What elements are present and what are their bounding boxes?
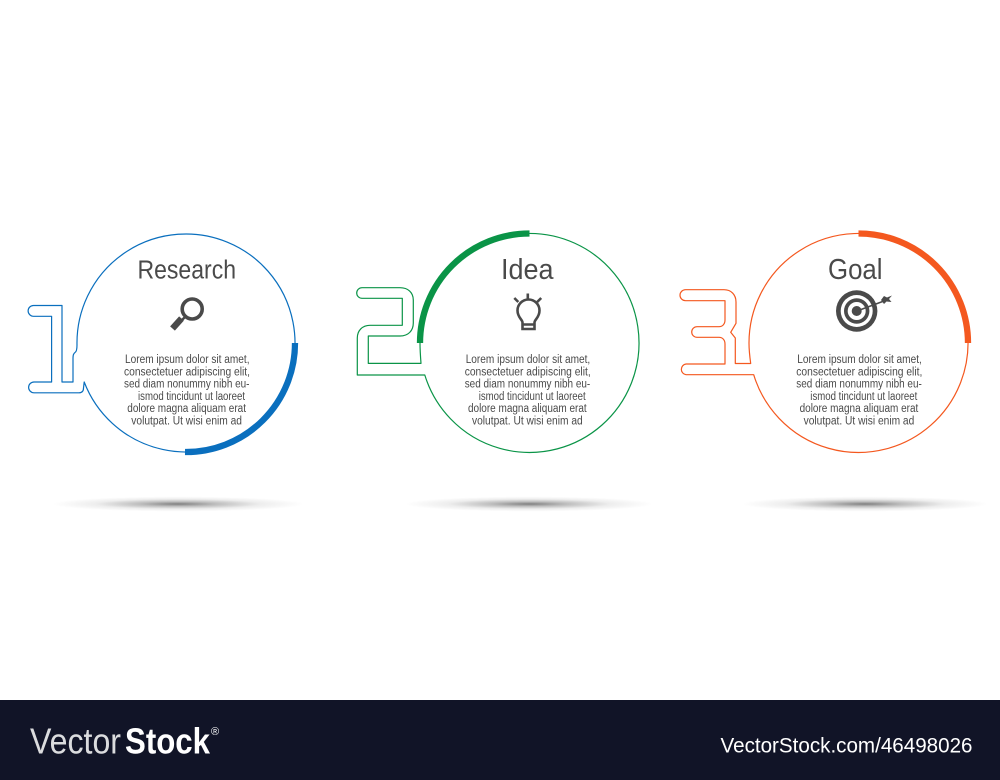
footer logo: VectorStock: Stock [125, 720, 211, 762]
icon: light bulb [514, 294, 541, 329]
text block: step 3: consectetuer adipiscing elit, [796, 366, 922, 378]
progress arc: blue [185, 343, 295, 452]
text block: step 3: Lorem ipsum dolor sit amet, [797, 354, 922, 366]
shadow under step 1 [52, 496, 304, 512]
progress arc: orange [858, 234, 968, 343]
footer bar [0, 700, 1000, 780]
progress arc: green [420, 234, 530, 343]
heading: Idea: Idea [501, 254, 554, 286]
text block: step 3 [796, 354, 922, 428]
text block: step 2: Lorem ipsum dolor sit amet, [466, 354, 590, 366]
text block: step 1 [124, 354, 250, 428]
footer logo: VectorStock [30, 720, 219, 762]
outline: numeral 2 and circle [357, 233, 639, 452]
panel: step 2 idea [357, 233, 653, 512]
text block: step 1: dolore magna aliquam erat [127, 403, 247, 415]
shadow under step 3 [742, 496, 988, 512]
text block: step 3: ismod tincidunt ut laoreet [810, 391, 918, 403]
text block: step 3: dolore magna aliquam erat [800, 403, 919, 415]
text block: step 1: consectetuer adipiscing elit, [124, 366, 250, 378]
icon: target with arrow [836, 290, 892, 332]
heading: Research: Research [138, 256, 236, 284]
footer logo: VectorStock: Vector [30, 720, 121, 762]
outline: numeral 3 and circle [680, 233, 968, 452]
text block: step 2: consectetuer adipiscing elit, [465, 366, 591, 378]
panel: step 3 goal [680, 233, 988, 512]
text block: step 2: volutpat. Ut wisi enim ad [472, 416, 583, 428]
text block: step 1: volutpat. Ut wisi enim ad [131, 416, 242, 428]
text block: step 2: sed diam nonummy nibh eu- [465, 379, 590, 391]
text block: step 3: volutpat. Ut wisi enim ad [804, 416, 914, 428]
text block: step 2 [465, 354, 591, 428]
icon: magnifying glass [172, 299, 202, 328]
footer image id: VectorStock.com/46498026 [720, 734, 972, 758]
shadow under step 2 [405, 496, 653, 512]
outline: numeral 1 and circle [28, 234, 295, 452]
panel: step 1 research [28, 234, 304, 512]
footer logo: VectorStock: ® [211, 726, 219, 738]
text block: step 1: ismod tincidunt ut laoreet [138, 391, 246, 403]
text block: step 1: sed diam nonummy nibh eu- [124, 379, 250, 391]
text block: step 2: ismod tincidunt ut laoreet [479, 391, 586, 403]
text block: step 2: dolore magna aliquam erat [468, 403, 587, 415]
heading: Goal: Goal [828, 254, 882, 286]
text block: step 3: sed diam nonummy nibh eu- [796, 379, 922, 391]
text block: step 1: Lorem ipsum dolor sit amet, [125, 354, 250, 366]
